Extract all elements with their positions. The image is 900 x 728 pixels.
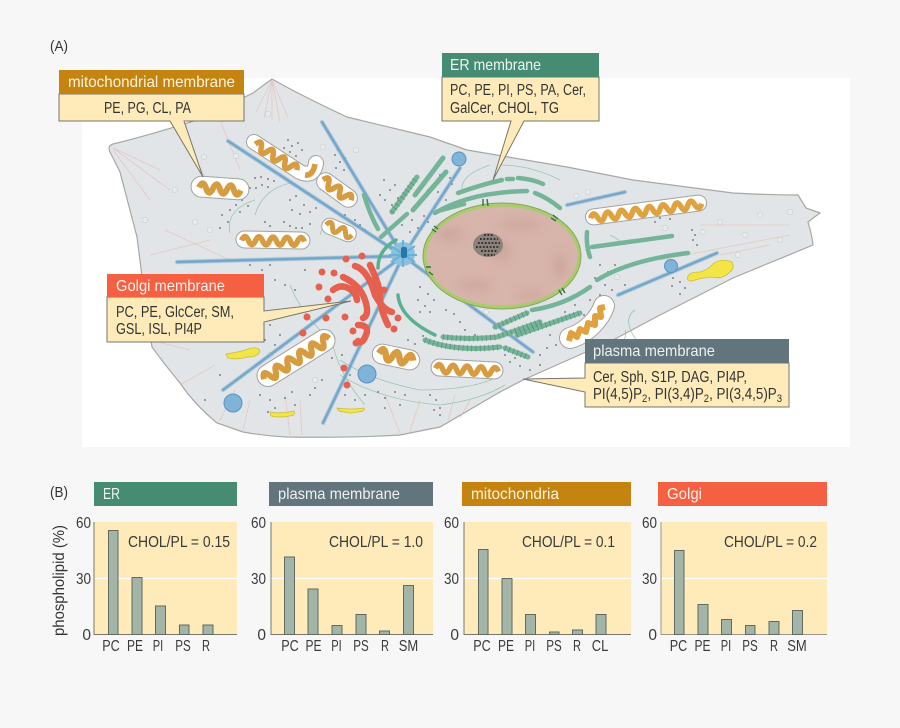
- mitochondria: [190, 140, 708, 391]
- chart: Golgi: PC: [670, 638, 687, 655]
- chart: plasma membrane: PC: [281, 638, 299, 655]
- nucleolus: [473, 233, 503, 257]
- chart: ER: ER: [103, 486, 120, 503]
- callout: plasma membrane: , PI(3,4)P: [647, 386, 704, 403]
- chart: ER: PE: [127, 638, 143, 655]
- chart: mitochondria: PS: [546, 638, 562, 655]
- chart: Golgi: Golgi: [667, 486, 702, 503]
- callout: mitochondrial membrane: [59, 70, 244, 177]
- chart: mitochondria: CHOL/PL = 0.1: [522, 534, 615, 551]
- chart: ER: PS: [175, 638, 191, 655]
- chart: Golgi: 0: [648, 627, 657, 644]
- callout: plasma membrane: 2: [642, 393, 647, 405]
- callout: Golgi membrane: [107, 274, 351, 342]
- chart: plasma membrane: PS: [353, 638, 369, 655]
- chart: plasma membrane: PI: [331, 638, 342, 655]
- callout: plasma membrane: [523, 339, 789, 407]
- callout: plasma membrane: Cer, Sph, S1P, DAG, PI4P,: [593, 369, 747, 386]
- chart: mitochondria: [444, 482, 631, 655]
- callout: ER membrane: [442, 53, 599, 180]
- lipid droplets: [226, 260, 733, 417]
- smooth ER: [364, 178, 688, 310]
- chart: ER: 60: [76, 515, 91, 532]
- chart: ER: PC: [102, 638, 120, 655]
- Golgi apparatus: [303, 256, 398, 385]
- chart: mitochondria: PC: [473, 638, 491, 655]
- callout: Golgi membrane: PC, PE, GlcCer, SM,: [116, 304, 234, 321]
- chart: mitochondria: PE: [498, 638, 514, 655]
- chart: Golgi: PE: [694, 638, 710, 655]
- chart: mitochondria: 30: [444, 571, 459, 588]
- chart: plasma membrane: R: [381, 638, 389, 655]
- chart: plasma membrane: plasma membrane: [278, 486, 400, 503]
- callout: ER membrane: PC, PE, PI, PS, PA, Cer,: [450, 82, 586, 99]
- callout: plasma membrane: , PI(3,4,5)P: [709, 386, 777, 403]
- callout: ER membrane: ER membrane: [450, 57, 541, 74]
- lysosomes: [224, 152, 678, 412]
- rough ER ribosomes: [392, 177, 580, 357]
- chart: Golgi: 60: [642, 515, 657, 532]
- callout: plasma membrane: 3: [777, 393, 782, 405]
- chart: plasma membrane: SM: [399, 638, 418, 655]
- nucleus: [423, 199, 581, 309]
- ribosome dots: [205, 140, 697, 415]
- thin green filaments: [229, 165, 640, 405]
- chart: Golgi: R: [770, 638, 778, 655]
- chart: ER: 0: [82, 627, 91, 644]
- centrosome: [389, 240, 417, 267]
- panel B label: (B): [50, 484, 68, 501]
- chart: Golgi: SM: [787, 638, 807, 655]
- chart: Golgi: [642, 482, 827, 655]
- chart: mitochondria: 60: [444, 515, 459, 532]
- chart: plasma membrane: 30: [251, 571, 266, 588]
- chart: plasma membrane: 60: [251, 515, 266, 532]
- cell illustration: [109, 79, 820, 437]
- y axis title: phospholipid (%): [51, 525, 68, 636]
- chart: ER: 30: [76, 571, 91, 588]
- chart: ER: [76, 482, 237, 655]
- chart: plasma membrane: 0: [257, 627, 266, 644]
- chart: mitochondria: CL: [592, 638, 609, 655]
- callout: mitochondrial membrane: PE, PG, CL, PA: [104, 100, 192, 117]
- callout: Golgi membrane: Golgi membrane: [116, 278, 225, 295]
- chart: mitochondria: PI: [525, 638, 535, 655]
- chart: plasma membrane: CHOL/PL = 1.0: [329, 534, 423, 551]
- chart: ER: CHOL/PL = 0.15: [128, 534, 230, 551]
- vesicles: [145, 114, 790, 380]
- chart: mitochondria: R: [573, 638, 581, 655]
- chart: Golgi: 30: [642, 571, 657, 588]
- callout: Golgi membrane: GSL, ISL, PI4P: [116, 321, 202, 338]
- chart: plasma membrane: [251, 482, 433, 655]
- callout: plasma membrane: plasma membrane: [593, 343, 715, 360]
- callout: plasma membrane: 2: [704, 393, 709, 405]
- panel A label: (A): [50, 38, 68, 55]
- callout: mitochondrial membrane: mitochondrial membrane: [68, 74, 235, 91]
- chart: ER: PI: [153, 638, 163, 655]
- callout: ER membrane: GalCer, CHOL, TG: [450, 100, 559, 117]
- callout: plasma membrane: PI(4,5)P: [593, 386, 650, 403]
- chart: mitochondria: 0: [450, 627, 459, 644]
- chart: Golgi: PS: [742, 638, 758, 655]
- chart: Golgi: CHOL/PL = 0.2: [724, 534, 817, 551]
- chart: mitochondria: mitochondria: [471, 486, 559, 503]
- chart: ER: R: [202, 638, 210, 655]
- microtubules: [177, 122, 717, 423]
- chart: plasma membrane: PE: [306, 638, 322, 655]
- chart: Golgi: PI: [721, 638, 731, 655]
- cell body: [109, 79, 820, 437]
